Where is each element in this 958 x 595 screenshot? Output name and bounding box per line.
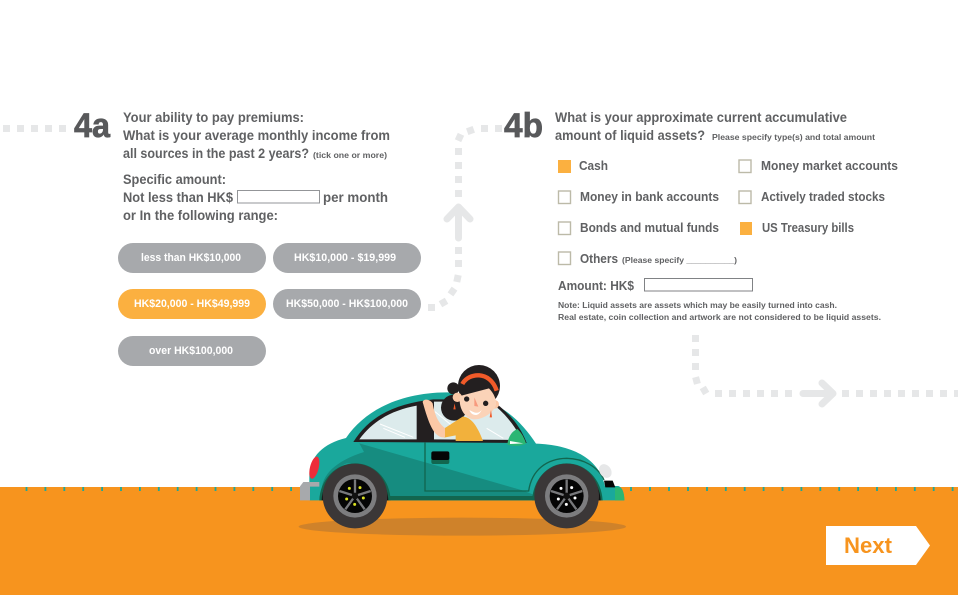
wheel arches bbox=[319, 463, 603, 500]
income range buttons: over HK$100,000 bbox=[149, 345, 233, 357]
door outline and fender bbox=[425, 443, 604, 491]
side mirror bbox=[507, 429, 526, 446]
specific amount input: Not less than HK$ bbox=[123, 190, 233, 205]
orange ground with teal ticks bbox=[0, 487, 958, 595]
woman ears bbox=[453, 393, 499, 409]
heading: 4a: 4a bbox=[74, 107, 111, 145]
car body bbox=[309, 392, 624, 500]
income range buttons: less than HK$10,000 bbox=[141, 252, 241, 264]
liquid asset checklist: (Please specify __________) bbox=[622, 255, 737, 265]
question 4b text: Please specify type(s) and total amount bbox=[712, 132, 875, 142]
dotted path: entering 4a from the left bbox=[3, 125, 66, 132]
woman torso bbox=[444, 417, 483, 441]
amount input: Amount: HK$ bbox=[558, 278, 635, 293]
car with waving woman driver bbox=[299, 365, 626, 536]
question 4a text: What is your average monthly income from bbox=[123, 128, 390, 143]
question 4a text: Your ability to pay premiums: bbox=[123, 110, 304, 125]
woman eyes, nose, smile and earrings bbox=[453, 396, 492, 417]
note: Note: Liquid assets are assets which may be easily turned into cash. bbox=[558, 300, 837, 310]
woman hair bbox=[441, 365, 500, 421]
specific amount input: per month bbox=[323, 190, 388, 205]
income range buttons bbox=[118, 243, 421, 366]
heading: 4b: 4b bbox=[504, 107, 543, 145]
woman arm bbox=[423, 400, 445, 437]
liquid asset checklist: Actively traded stocks bbox=[761, 189, 885, 204]
specific amount input bbox=[123, 172, 388, 223]
underbody strip bbox=[385, 496, 537, 500]
amount input bbox=[558, 278, 752, 293]
woman headband bbox=[462, 375, 497, 391]
liquid asset checklist: US Treasury bills bbox=[762, 220, 854, 235]
question 4a text bbox=[123, 110, 390, 161]
woman face bbox=[460, 388, 496, 419]
specific amount input: Specific amount: bbox=[123, 172, 226, 187]
liquid asset checklist: Bonds and mutual funds bbox=[580, 220, 719, 235]
liquid asset checklist: Others bbox=[580, 251, 618, 266]
window glass bbox=[359, 402, 522, 440]
next button: Next bbox=[844, 533, 893, 558]
front bumper bbox=[615, 487, 624, 500]
rear bumper bbox=[300, 482, 319, 500]
tail light bbox=[307, 456, 321, 480]
specific amount input: or In the following range: bbox=[123, 208, 278, 223]
ground shadow bbox=[299, 518, 626, 536]
glass streaks bbox=[380, 412, 503, 438]
headlight bbox=[596, 462, 614, 480]
liquid asset checklist bbox=[558, 158, 898, 266]
liquid asset checklist: Money market accounts bbox=[761, 158, 898, 173]
grille bbox=[604, 481, 615, 487]
door handle bbox=[431, 455, 449, 464]
next button bbox=[826, 526, 930, 565]
note: Real estate, coin collection and artwork are not considered to be liquid assets. bbox=[558, 312, 881, 322]
dotted arrow: leaving 4b to the right bbox=[692, 335, 958, 404]
income range buttons: HK$10,000 - $19,999 bbox=[294, 252, 396, 264]
question 4b text bbox=[555, 110, 875, 143]
body shading bbox=[322, 443, 537, 496]
front wheel bbox=[534, 464, 599, 528]
liquid asset checklist: Money in bank accounts bbox=[580, 189, 719, 204]
rear wheel bbox=[323, 464, 387, 528]
dotted arrow: from 4a up to 4b bbox=[428, 125, 502, 311]
question 4a text: (tick one or more) bbox=[313, 150, 387, 160]
income range buttons: HK$20,000 - HK$49,999 bbox=[134, 298, 250, 310]
income range buttons: HK$50,000 - HK$100,000 bbox=[286, 298, 408, 310]
question 4b text: What is your approximate current accumulative bbox=[555, 110, 847, 125]
question 4b text: amount of liquid assets? bbox=[555, 128, 705, 143]
note bbox=[558, 300, 881, 322]
window frame bbox=[353, 399, 527, 443]
liquid asset checklist: Cash bbox=[579, 158, 608, 173]
question 4a text: all sources in the past 2 years? bbox=[123, 146, 309, 161]
